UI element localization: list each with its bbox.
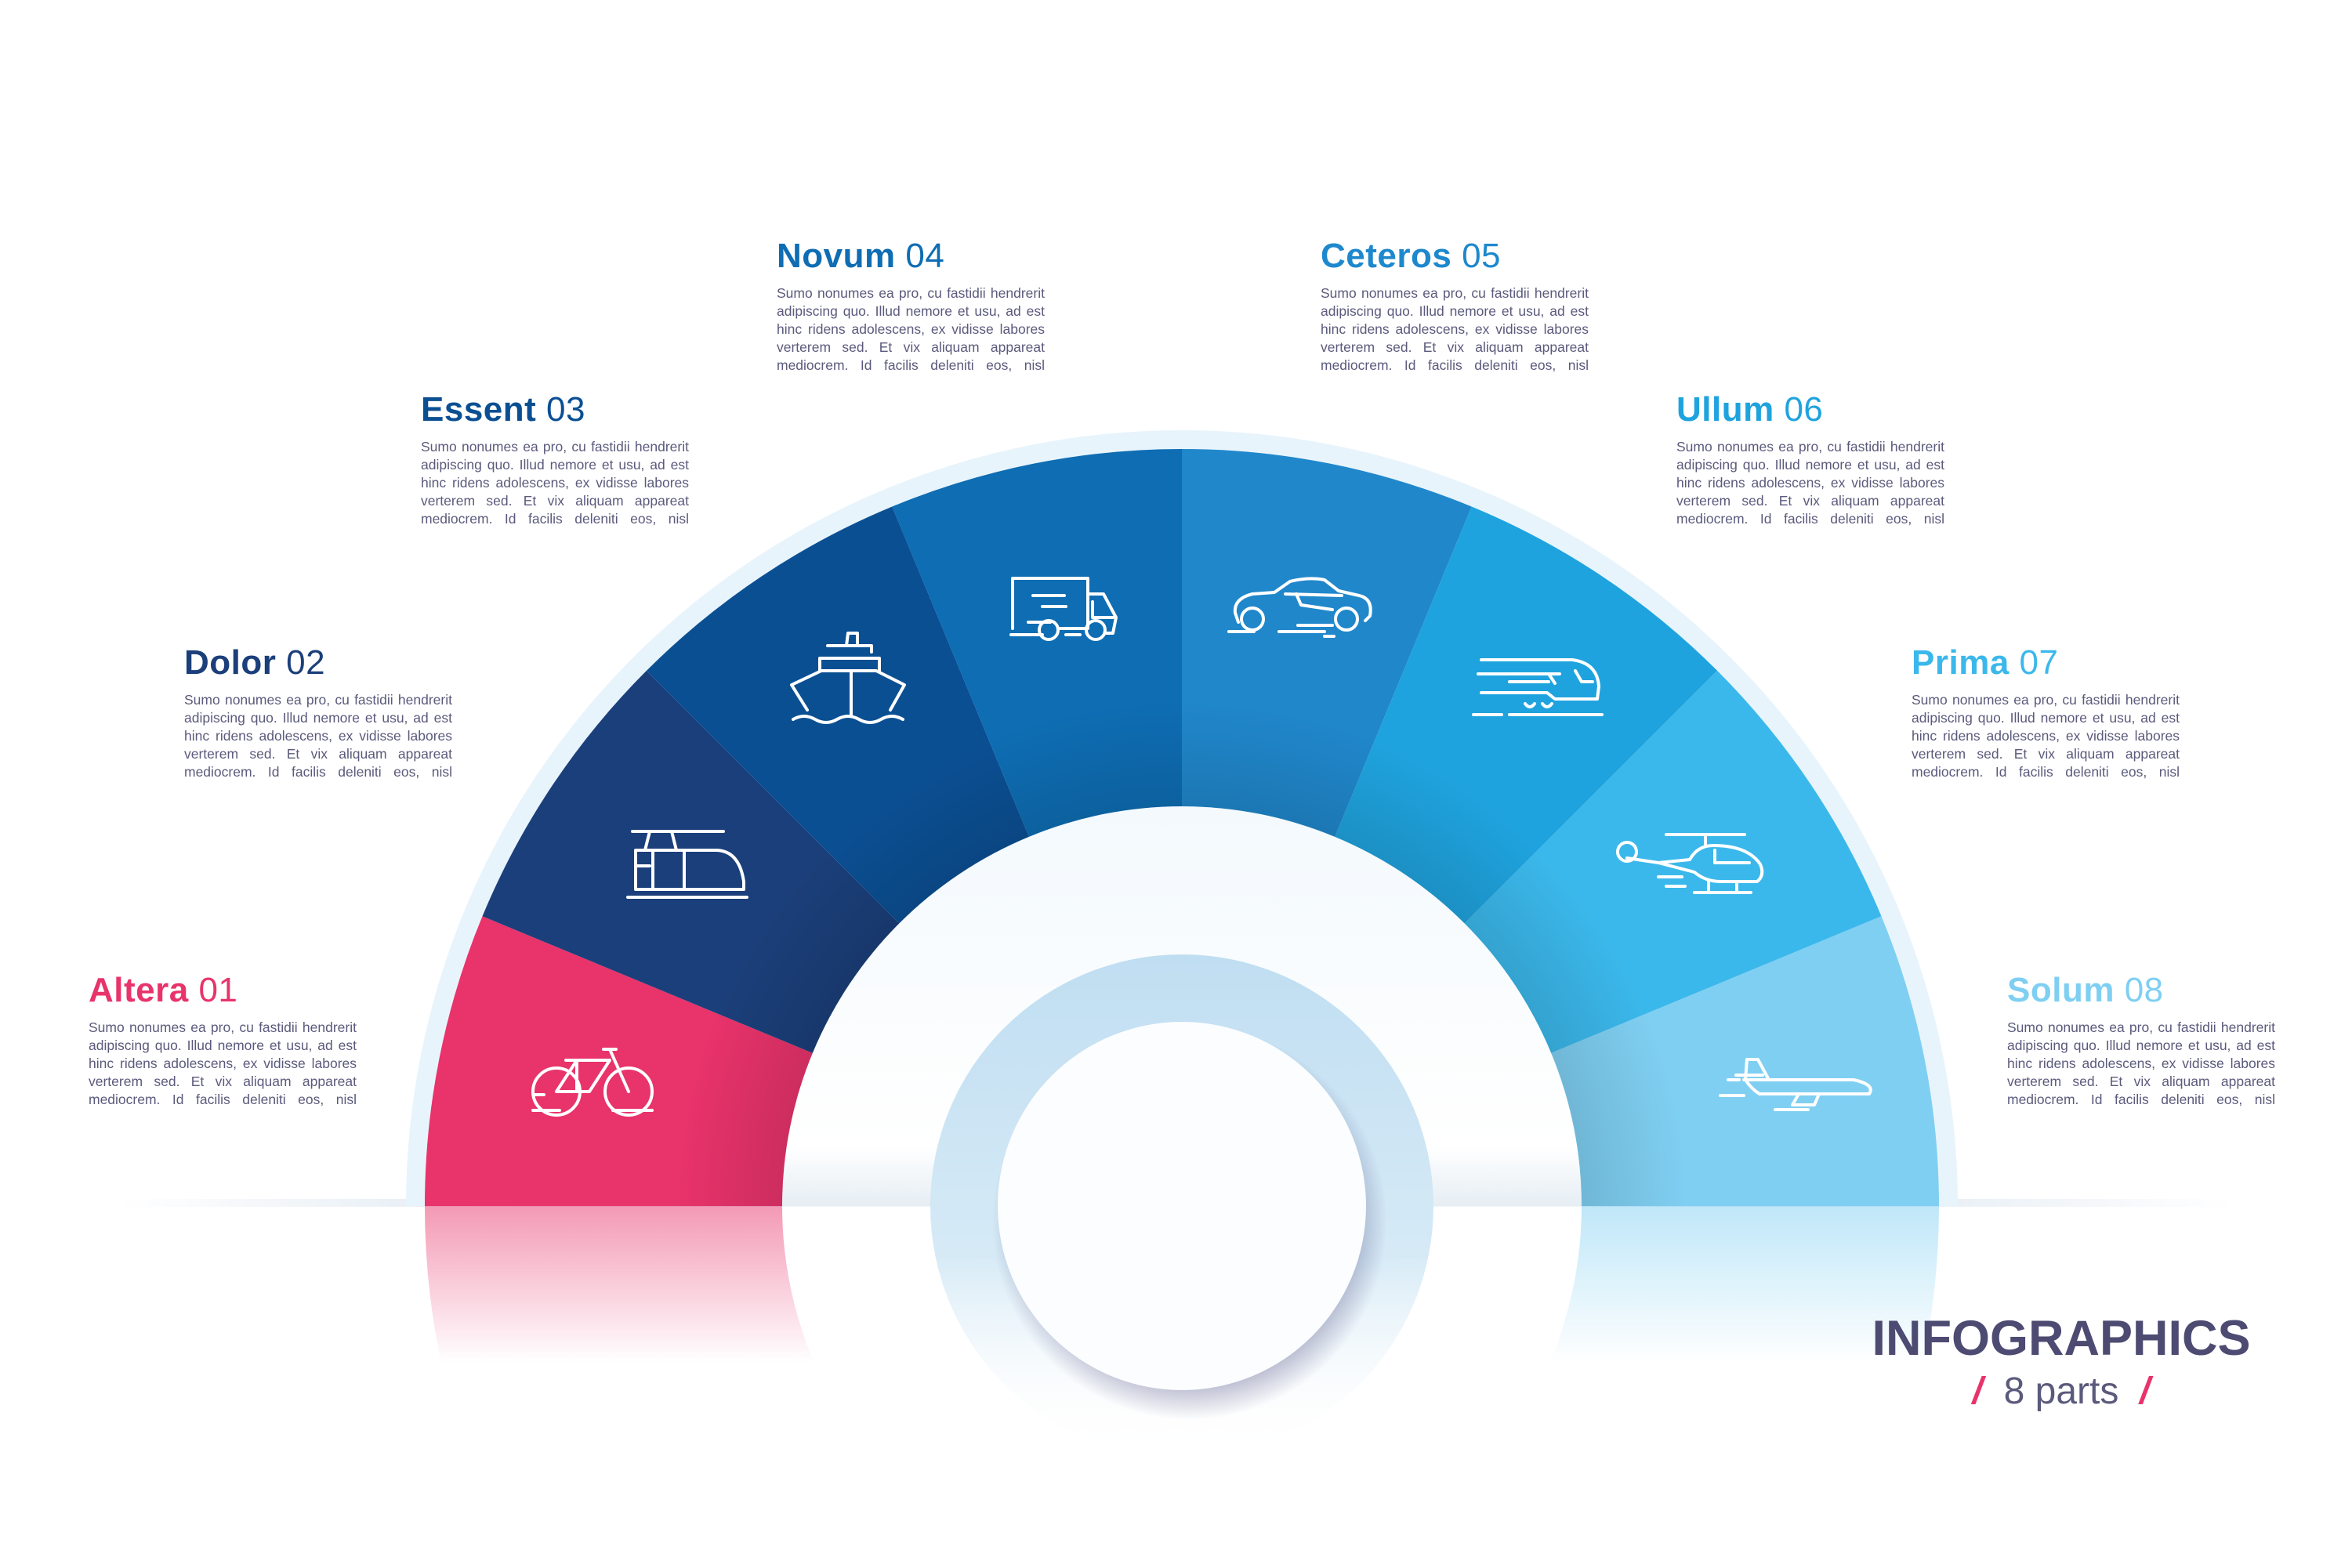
outer light ring: [406, 430, 1958, 1206]
text block: Solum 08: Solum 08: [2007, 971, 2164, 1009]
text block: Essent 03: hinc ridens adolescens, ex vidisse labores: [421, 475, 689, 491]
segment 04: [892, 449, 1182, 1206]
text block: Novum 04: hinc ridens adolescens, ex vidisse labores: [777, 321, 1045, 337]
text block: Prima 07: hinc ridens adolescens, ex vidisse labores: [1912, 728, 2180, 744]
text block: Prima 07: Sumo nonumes ea pro, cu fastidii hendrerit: [1912, 692, 2180, 708]
text block: Altera 01: verterem sed. Et vix aliquam appareat: [89, 1074, 357, 1089]
icon: airplane: [1720, 1059, 1871, 1110]
text block: Ullum 06: [1676, 390, 1944, 527]
icon: car: [1229, 578, 1371, 636]
text block: Novum 04: mediocrem. Id facilis deleniti eos, nisl: [777, 357, 1045, 373]
text block: Ceteros 05: Ceteros 05: [1321, 237, 1501, 275]
text block: Essent 03: mediocrem. Id facilis deleniti eos, nisl: [421, 511, 689, 527]
text block: Ullum 06: verterem sed. Et vix aliquam appareat: [1676, 493, 1944, 509]
horizon line: [118, 1199, 2234, 1207]
text block: Prima 07: verterem sed. Et vix aliquam appareat: [1912, 746, 2180, 762]
segment 05: [1182, 449, 1472, 1206]
text block: Ceteros 05: verterem sed. Et vix aliquam appareat: [1321, 339, 1589, 355]
text block: Altera 01: adipiscing quo. Illud nemore et usu, ad est: [89, 1037, 357, 1053]
chart: semicircle: [224, 430, 2127, 1417]
icon: tram: [628, 831, 747, 897]
text block: Essent 03: [421, 390, 689, 527]
segment 08: [1182, 916, 1939, 1206]
text block: Solum 08: adipiscing quo. Illud nemore et usu, ad est: [2007, 1037, 2275, 1053]
text block: Dolor 02: mediocrem. Id facilis deleniti eos, nisl: [184, 764, 452, 780]
icon: train: [1473, 660, 1602, 715]
text block: Solum 08: Sumo nonumes ea pro, cu fastidii hendrerit: [2007, 1019, 2275, 1035]
segment 03: [647, 506, 1182, 1206]
text block: Ceteros 05: mediocrem. Id facilis deleniti eos, nisl: [1321, 357, 1589, 373]
reflection: [425, 1206, 1939, 1349]
subtitle: 8 parts: / 8 parts /: [1973, 1371, 2150, 1412]
text block: Altera 01: [89, 971, 357, 1107]
inner white semicircle: [782, 806, 1582, 1206]
text block: Dolor 02: hinc ridens adolescens, ex vidisse labores: [184, 728, 452, 744]
icon: ship: [792, 633, 904, 722]
text block: Solum 08: verterem sed. Et vix aliquam appareat: [2007, 1074, 2275, 1089]
text block: Dolor 02: Sumo nonumes ea pro, cu fastidii hendrerit: [184, 692, 452, 708]
title: INFOGRAPHICS: INFOGRAPHICS: [1872, 1311, 2251, 1366]
inner ring: [930, 954, 1433, 1458]
segment 01: [425, 916, 1182, 1206]
icon: bicycle: [533, 1049, 652, 1115]
text block: Altera 01: mediocrem. Id facilis deleniti eos, nisl: [89, 1092, 357, 1107]
text block: Dolor 02: [184, 643, 452, 780]
text block: Essent 03: Sumo nonumes ea pro, cu fastidii hendrerit: [421, 439, 689, 454]
text block: Novum 04: Sumo nonumes ea pro, cu fastidii hendrerit: [777, 285, 1045, 301]
text block: Novum 04: adipiscing quo. Illud nemore et usu, ad est: [777, 303, 1045, 319]
icon: truck: [1011, 578, 1116, 639]
text block: Altera 01: hinc ridens adolescens, ex vidisse labores: [89, 1056, 357, 1071]
text block: Ullum 06: adipiscing quo. Illud nemore et usu, ad est: [1676, 457, 1944, 473]
segment 02: [483, 671, 1182, 1206]
text block: Prima 07: mediocrem. Id facilis deleniti eos, nisl: [1912, 764, 2180, 780]
text block: Dolor 02: Dolor 02: [184, 643, 325, 682]
text block: Ceteros 05: hinc ridens adolescens, ex vidisse labores: [1321, 321, 1589, 337]
text block: Ceteros 05: adipiscing quo. Illud nemore et usu, ad est: [1321, 303, 1589, 319]
text block: Ceteros 05: [1321, 237, 1589, 373]
center circle: [998, 1022, 1366, 1390]
text block: Novum 04: Novum 04: [777, 237, 944, 275]
text block: Altera 01: Sumo nonumes ea pro, cu fastidii hendrerit: [89, 1019, 357, 1035]
title: INFOGRAPHICS: [1872, 1311, 2251, 1412]
text block: Novum 04: [777, 237, 1045, 373]
center circle shadow: [992, 1025, 1387, 1420]
text block: Ceteros 05: Sumo nonumes ea pro, cu fastidii hendrerit: [1321, 285, 1589, 301]
text block: Dolor 02: adipiscing quo. Illud nemore et usu, ad est: [184, 710, 452, 726]
text block: Prima 07: [1912, 643, 2180, 780]
text block: Altera 01: Altera 01: [89, 971, 237, 1009]
text block: Ullum 06: mediocrem. Id facilis deleniti eos, nisl: [1676, 511, 1944, 527]
text block: Prima 07: adipiscing quo. Illud nemore et usu, ad est: [1912, 710, 2180, 726]
text block: Solum 08: mediocrem. Id facilis deleniti eos, nisl: [2007, 1092, 2275, 1107]
text block: Prima 07: Prima 07: [1912, 643, 2058, 682]
segment 06: [1182, 506, 1717, 1206]
icon: helicopter: [1618, 835, 1762, 893]
text block: Solum 08: hinc ridens adolescens, ex vidisse labores: [2007, 1056, 2275, 1071]
text block: Essent 03: Essent 03: [421, 390, 585, 429]
segment 07: [1182, 671, 1881, 1206]
text block: Novum 04: verterem sed. Et vix aliquam appareat: [777, 339, 1045, 355]
text block: Essent 03: adipiscing quo. Illud nemore et usu, ad est: [421, 457, 689, 473]
text block: Essent 03: verterem sed. Et vix aliquam appareat: [421, 493, 689, 509]
text block: Ullum 06: Sumo nonumes ea pro, cu fastidii hendrerit: [1676, 439, 1944, 454]
text block: Dolor 02: verterem sed. Et vix aliquam appareat: [184, 746, 452, 762]
text block: Ullum 06: Ullum 06: [1676, 390, 1823, 429]
text block: Solum 08: [2007, 971, 2275, 1107]
text block: Ullum 06: hinc ridens adolescens, ex vidisse labores: [1676, 475, 1944, 491]
